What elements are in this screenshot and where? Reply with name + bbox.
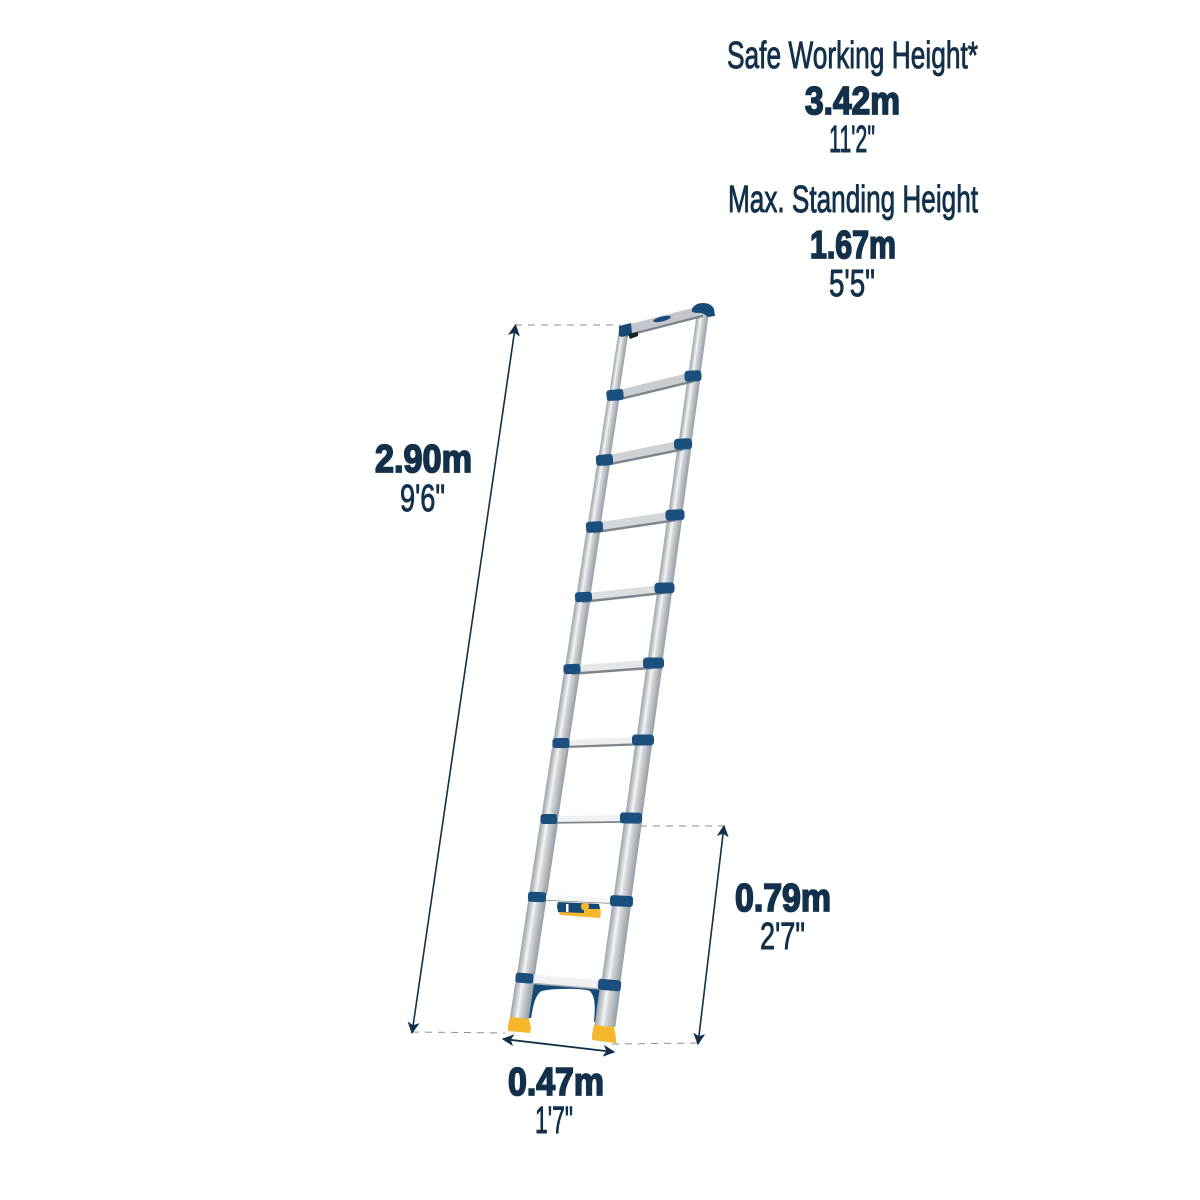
label: ladder width 0.47m: 0.47m <box>508 1061 604 1104</box>
left rail <box>509 330 633 1022</box>
blue clamps right <box>598 370 702 992</box>
rung clip <box>557 902 601 918</box>
top cap <box>628 303 715 339</box>
ladder illustration <box>508 303 715 1043</box>
label: closed length 2.90m <box>375 438 472 520</box>
top rung badge <box>653 314 671 324</box>
dimension arrow: height 0.79m <box>612 826 724 1044</box>
label: rung spacing 0.79m: 0.79m <box>735 877 831 920</box>
heading: safe working height: Safe Working Height* <box>727 35 978 77</box>
yellow feet <box>508 1017 616 1043</box>
label: rung spacing 0.79m: 2'7" <box>760 916 805 958</box>
dimension arrow: height 2.90m <box>412 325 620 1033</box>
label: closed length 2.90m: 9'6" <box>400 478 445 520</box>
heading: max standing height: Max. Standing Height <box>728 179 978 221</box>
dimension arrow: width 0.47m <box>503 1039 614 1052</box>
heading: safe working height: 3.42m <box>805 80 900 123</box>
rungs <box>525 310 703 990</box>
heading: safe working height <box>727 35 978 161</box>
heading: max standing height: 1.67m <box>810 224 896 267</box>
right rail <box>594 310 714 1027</box>
label: closed length 2.90m: 2.90m <box>375 438 472 481</box>
heading: max standing height: 5'5" <box>829 263 875 305</box>
label: ladder width 0.47m <box>508 1061 604 1142</box>
heading: max standing height <box>728 179 978 305</box>
label: rung spacing 0.79m <box>735 877 831 958</box>
base brace <box>525 982 601 1022</box>
blue clamps left <box>515 323 632 984</box>
label: ladder width 0.47m: 1'7" <box>535 1100 573 1142</box>
heading: safe working height: 11'2" <box>829 119 875 161</box>
